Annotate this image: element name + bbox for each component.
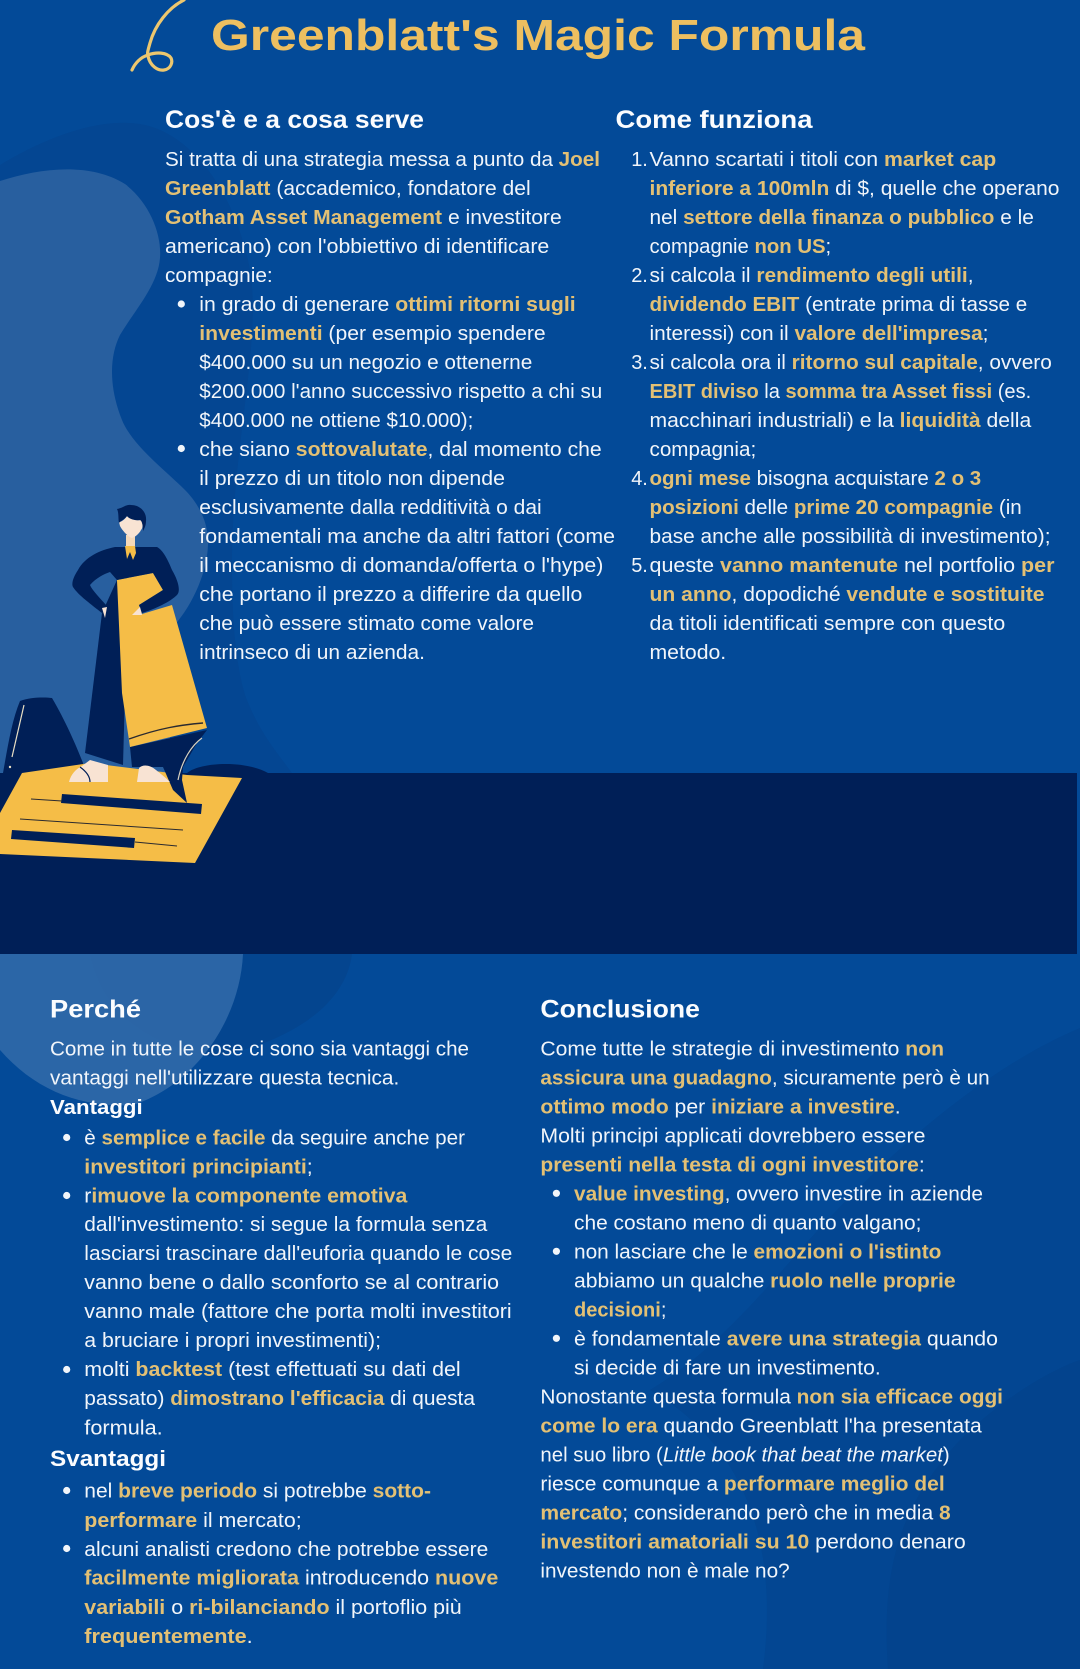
numbered list: dividendo EBIT (entrate prima di tasse e <box>650 294 1027 316</box>
text block: Molti principi applicati dovrebbero essere <box>540 1125 925 1147</box>
numbered list: metodo. <box>650 642 726 664</box>
numbered list: si calcola il rendimento degli utili , <box>650 265 974 287</box>
dark navy band <box>0 764 1077 954</box>
list: vantaggi: lasciarsi trascinare dall'euforia quando le cose <box>84 1243 512 1265</box>
intro text <box>50 1038 469 1090</box>
figure <box>69 505 207 803</box>
list: svantaggi: variabili o ri-bilanciando il portoflio più <box>84 1597 462 1619</box>
text block: riesce comunque a performare meglio del <box>540 1473 945 1495</box>
text block: investimenti (per esempio spendere <box>199 323 546 345</box>
numbered list: compagnie non US; <box>650 236 831 258</box>
panel: come funziona <box>616 106 1060 664</box>
heading: Perché <box>50 996 141 1024</box>
heading: Come funziona <box>616 106 814 134</box>
list: svantaggi: performare il mercato; <box>84 1510 302 1532</box>
numbered list: inferiore a 100mln di $, quelle che operano <box>650 178 1060 200</box>
text block: nel suo libro (Little book that beat the market ) <box>540 1444 950 1466</box>
text block: investitori amatoriali su 10 perdono denaro <box>540 1531 966 1553</box>
panel: cos'è e a cosa serve <box>165 106 615 664</box>
text block: esclusivamente dalla redditività o dai <box>199 497 542 519</box>
intro text: vantaggi nell'utilizzare questa tecnica. <box>50 1068 399 1090</box>
list: svantaggi: frequentemente . <box>84 1626 253 1648</box>
text block: Come tutte le strategie di investimento non <box>540 1038 944 1060</box>
list: vantaggi: a bruciare i propri investimenti); <box>84 1330 381 1352</box>
numbered list: ogni mese bisogna acquistare 2 o 3 <box>650 468 981 490</box>
numbered list: da titoli identificati sempre con questo <box>650 613 1005 635</box>
text block: value investing , ovvero investire in aziende <box>574 1183 983 1205</box>
numbered list: interessi) con il valore dell'impresa ; <box>650 323 988 345</box>
numbered list: macchinari industriali) e la liquidità della <box>650 410 1032 432</box>
text block: non lasciare che le emozioni o l'istinto <box>574 1241 941 1263</box>
text block: ottimo modo per iniziare a investire . <box>540 1096 901 1118</box>
list: svantaggi: facilmente migliorata introducendo nuove <box>84 1568 498 1590</box>
list: vantaggi: investitori principianti ; <box>84 1156 313 1178</box>
panel: conclusione <box>540 995 1003 1582</box>
heading: Conclusione <box>540 995 700 1023</box>
numbered list <box>631 149 1060 664</box>
text block: assicura una guadagno , sicuramente però è un <box>540 1067 990 1089</box>
text block: il prezzo di un titolo non dipende <box>199 468 505 490</box>
text block: Nonostante questa formula non sia efficace oggi <box>540 1386 1003 1408</box>
subheading: svantaggi: Svantaggi <box>50 1446 166 1471</box>
text block: $200.000 l'anno successivo rispetto a chi su <box>199 381 602 403</box>
numbered list: 2. <box>631 265 648 287</box>
list: vantaggi: vanno male (fattore che porta molti investitori <box>84 1301 512 1323</box>
text block <box>540 1038 1003 1582</box>
text block: compagnie: <box>165 265 273 287</box>
text block: in grado di generare ottimi ritorni sugli <box>199 294 576 316</box>
list: vantaggi: vanno bene o dallo sconforto se al contrario <box>84 1272 499 1294</box>
numbered list: Vanno scartati i titoli con market cap <box>650 149 996 171</box>
list: vantaggi: formula. <box>84 1418 163 1440</box>
list: vantaggi: molti backtest (test effettuati su dati del <box>84 1359 461 1381</box>
numbered list: compagnia; <box>650 439 756 461</box>
numbered list: posizioni delle prime 20 compagnie (in <box>650 497 1022 519</box>
text block: Si tratta di una strategia messa a punto da Joel <box>165 149 600 171</box>
text block: intrinseco di un azienda. <box>199 642 425 664</box>
list: svantaggi <box>63 1480 498 1648</box>
numbered list: queste vanno mantenute nel portfolio per <box>650 555 1055 577</box>
text block: si decide di fare un investimento. <box>574 1357 881 1379</box>
text block <box>165 149 615 664</box>
text block: che portano il prezzo a differire da quello <box>199 584 582 606</box>
numbered list: 3. <box>631 352 648 374</box>
text block: mercato; considerando però che in media 8 <box>540 1502 951 1524</box>
list: vantaggi: passato) dimostrano l'efficacia di questa <box>84 1388 476 1410</box>
numbered list: 1. <box>631 149 648 171</box>
text block: che siano sottovalutate , dal momento che <box>199 439 602 461</box>
numbered list: un anno, dopodiché vendute e sostituite <box>650 584 1044 606</box>
text block: fondamentali ma anche da altri fattori (come <box>199 526 615 548</box>
numbered list: 5. <box>631 555 648 577</box>
text block: che costano meno di quanto valgano; <box>574 1212 921 1234</box>
panel: perché <box>50 996 512 1648</box>
numbered list: 4. <box>631 468 648 490</box>
heading: Cos'è e a cosa serve <box>165 106 424 134</box>
text block: Greenblatt (accademico, fondatore del <box>165 178 531 200</box>
text block: investendo non è male no? <box>540 1560 790 1582</box>
text block: decisioni; <box>574 1299 666 1321</box>
text block: il meccanismo di domanda/offerta o l'hype) <box>199 555 603 577</box>
text block: è fondamentale avere una strategia quando <box>574 1328 998 1350</box>
title: Greenblatt's Magic Formula <box>211 11 866 60</box>
list: vantaggi: dall'investimento: si segue la formula senza <box>84 1214 488 1236</box>
text block: che può essere stimato come valore <box>199 613 534 635</box>
illustration: person standing on document <box>0 505 242 863</box>
icon: title flourish <box>132 0 184 70</box>
numbered list: nel settore della finanza o pubblico e le <box>650 207 1034 229</box>
intro text: Come in tutte le cose ci sono sia vantaggi che <box>50 1038 469 1060</box>
list: vantaggi <box>63 1127 512 1440</box>
text block: Gotham Asset Management e investitore <box>165 207 562 229</box>
text block: come lo era quando Greenblatt l'ha presentata <box>540 1415 983 1437</box>
text block: americano) con l'obbiettivo di identificare <box>165 236 549 258</box>
text block: $400.000 ne ottiene $10.000); <box>199 410 473 432</box>
icon: navy cone <box>0 697 83 780</box>
document sheet <box>0 763 242 863</box>
numbered list: EBIT diviso la somma tra Asset fissi (es. <box>650 381 1031 403</box>
list: vantaggi: rimuove la componente emotiva <box>84 1185 408 1207</box>
text block: $400.000 su un negozio e ottenerne <box>199 352 532 374</box>
text block: presenti nella testa di ogni investitore : <box>540 1154 925 1176</box>
subheading: vantaggi: Vantaggi <box>50 1097 143 1119</box>
list: vantaggi: è semplice e facile da seguire anche per <box>84 1127 465 1149</box>
list: svantaggi: alcuni analisti credono che potrebbe essere <box>84 1539 488 1561</box>
numbered list: base anche alle possibilità di investimento); <box>650 526 1050 548</box>
numbered list: si calcola ora il ritorno sul capitale , ovvero <box>650 352 1052 374</box>
list: svantaggi: nel breve periodo si potrebbe sotto- <box>84 1480 431 1502</box>
text block: abbiamo un qualche ruolo nelle proprie <box>574 1270 956 1292</box>
